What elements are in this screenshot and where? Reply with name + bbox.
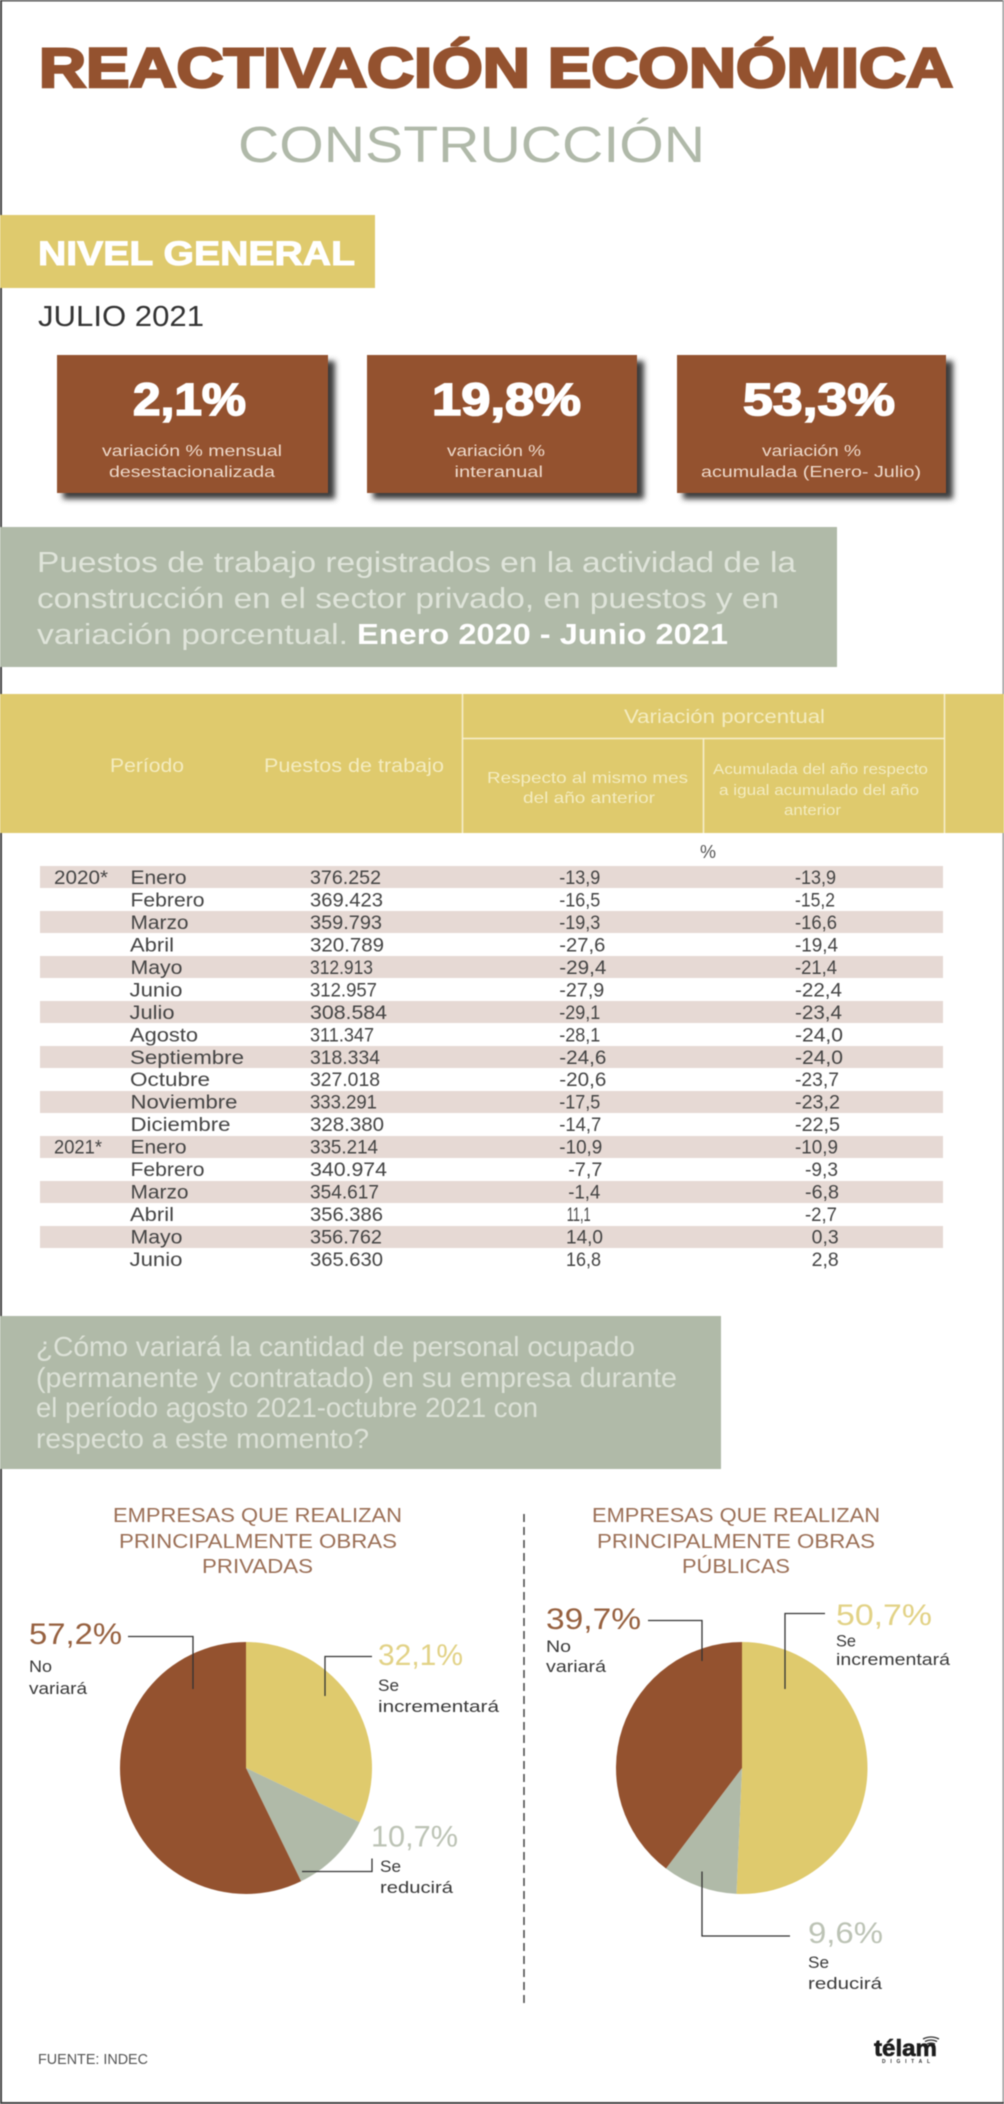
table header: anterior <box>784 803 841 819</box>
section heading: nivel general <box>0 215 375 288</box>
row: marzo 2020: -16,6 <box>795 913 837 934</box>
panel: pregunta de la encuesta: (permanente y contratado) en su empresa durante <box>36 1362 677 1393</box>
row: julio 2020: 308.584 <box>310 1003 387 1024</box>
row: febrero 2021: 340.974 <box>310 1160 387 1181</box>
pie chart: obras públicas <box>616 1642 867 1894</box>
row: junio 2020 <box>130 980 842 1001</box>
panel: descripción de la tabla <box>0 527 837 667</box>
row: abril 2020: -27,6 <box>559 935 605 956</box>
panel: descripción de la tabla: variación porcentual. <box>37 619 348 651</box>
callout: privadas se reducirá: Se <box>380 1857 401 1876</box>
callout: públicas no variará: 39,7% <box>546 1603 641 1636</box>
dashed divider <box>523 1514 525 2008</box>
row: junio 2020: -22,4 <box>795 980 842 1001</box>
row: febrero 2021: Febrero <box>130 1160 204 1181</box>
heading: obras privadas: EMPRESAS QUE REALIZAN <box>113 1505 402 1527</box>
row: mayo 2020: Mayo <box>130 958 182 979</box>
callout: privadas no variará: variará <box>29 1679 88 1698</box>
row: marzo 2020: Marzo <box>130 913 188 934</box>
row: diciembre 2020: Diciembre <box>130 1115 230 1136</box>
callout: públicas se reducirá: Se <box>808 1953 829 1972</box>
callout: privadas no variará <box>29 1618 193 1698</box>
row: mayo 2021: 0,3 <box>812 1228 839 1248</box>
row: mayo 2020: 312.913 <box>310 958 373 979</box>
stat card: variación interanual: interanual <box>454 464 543 481</box>
row: julio 2020 <box>130 1003 842 1024</box>
section heading: nivel general: NIVEL GENERAL <box>38 235 355 273</box>
row: octubre 2020: 327.018 <box>310 1070 380 1091</box>
callout: privadas se incrementará: 32,1% <box>378 1639 463 1672</box>
row: junio 2021: 365.630 <box>310 1250 383 1271</box>
row: junio 2020: Junio <box>130 980 182 1001</box>
row: abril 2020: -19,4 <box>795 935 838 956</box>
row: junio 2020: 312.957 <box>310 980 377 1001</box>
row: agosto 2020 <box>130 1025 843 1046</box>
row: enero 2021: -10,9 <box>795 1138 838 1159</box>
callout: públicas se reducirá <box>702 1872 883 1993</box>
stat card: variación acumulada: variación % <box>762 443 861 460</box>
heading: obras privadas: PRIVADAS <box>202 1556 313 1578</box>
callout: privadas se incrementará: Se <box>378 1676 399 1695</box>
pie chart: obras privadas <box>120 1642 372 1894</box>
row: enero 2021: -10,9 <box>559 1138 602 1159</box>
panel: descripción de la tabla: Puestos de trabajo registrados en la actividad de la <box>37 547 797 579</box>
row: marzo 2020: 359.793 <box>310 913 382 934</box>
row: septiembre 2020: -24,0 <box>795 1048 843 1069</box>
row: enero 2020 <box>54 868 836 889</box>
row: febrero 2021: -7,7 <box>568 1160 602 1181</box>
heading: obras públicas: PÚBLICAS <box>682 1555 790 1578</box>
panel: pregunta de la encuesta: respecto a este momento? <box>36 1423 369 1454</box>
row: febrero 2020: -15,2 <box>795 890 835 912</box>
row: julio 2020: -23,4 <box>795 1003 842 1024</box>
row: septiembre 2020 <box>130 1048 843 1069</box>
stat card: variación interanual: 19,8% <box>432 374 581 425</box>
heading: obras privadas: PRINCIPALMENTE OBRAS <box>119 1531 397 1553</box>
row: marzo 2021: -6,8 <box>805 1183 839 1204</box>
row: diciembre 2020: -14,7 <box>559 1115 601 1136</box>
row: noviembre 2020: 333.291 <box>310 1093 377 1114</box>
row: mayo 2021: 14,0 <box>566 1228 603 1248</box>
callout: públicas no variará: No <box>546 1637 571 1656</box>
row: mayo 2020: -29,4 <box>559 958 607 979</box>
row: junio 2021: Junio <box>130 1250 182 1271</box>
row: agosto 2020: 311.347 <box>310 1025 374 1046</box>
row: marzo 2021: Marzo <box>130 1183 188 1204</box>
row: julio 2020: Julio <box>130 1003 174 1024</box>
callout: privadas se reducirá: reducirá <box>380 1878 454 1897</box>
table header: Respecto al mismo mes <box>487 770 688 787</box>
row: abril 2020: Abril <box>130 935 174 956</box>
data table <box>40 866 943 1271</box>
row: febrero 2021 <box>130 1160 838 1181</box>
panel: descripción de la tabla: Enero 2020 - Junio 2021 <box>357 619 728 651</box>
callout: privadas no variará: 57,2% <box>29 1618 122 1651</box>
row: septiembre 2020: -24,6 <box>559 1048 606 1069</box>
row: mayo 2020: -21,4 <box>795 958 837 979</box>
callout: privadas no variará: No <box>29 1657 52 1676</box>
row: abril 2021: -2,7 <box>805 1205 837 1226</box>
row: marzo 2021: -1,4 <box>568 1183 601 1204</box>
row: enero 2021 <box>54 1138 838 1159</box>
row: agosto 2020: Agosto <box>130 1025 198 1046</box>
callout: privadas se incrementará <box>325 1639 500 1716</box>
row: octubre 2020: Octubre <box>130 1070 210 1091</box>
callout: públicas se incrementará: 50,7% <box>836 1599 932 1632</box>
callout: privadas se reducirá <box>302 1820 458 1897</box>
row: junio 2021: 16,8 <box>566 1250 601 1271</box>
stat card: variación mensual: variación % mensual <box>102 443 282 460</box>
row: julio 2020: -29,1 <box>559 1003 600 1024</box>
row: junio 2021 <box>130 1250 839 1271</box>
row: enero 2021: 335.214 <box>310 1138 378 1159</box>
row: octubre 2020 <box>130 1070 839 1091</box>
row: enero 2020: -13,9 <box>559 868 600 889</box>
row: febrero 2020: -16,5 <box>559 890 600 912</box>
heading: obras públicas: EMPRESAS QUE REALIZAN <box>592 1505 880 1527</box>
panel: pregunta de la encuesta: ¿Cómo variará la cantidad de personal ocupado <box>36 1331 635 1362</box>
table header: del año anterior <box>523 790 656 807</box>
row: enero 2020: -13,9 <box>795 868 836 889</box>
row: septiembre 2020: Septiembre <box>130 1048 244 1069</box>
heading: obras privadas <box>113 1505 402 1578</box>
row: abril 2021: 356.386 <box>310 1205 383 1226</box>
table header: Período <box>110 756 184 777</box>
stat card: variación interanual: variación % <box>447 443 545 460</box>
row: agosto 2020: -28,1 <box>559 1025 600 1046</box>
row: noviembre 2020 <box>130 1093 840 1114</box>
row: mayo 2021: Mayo <box>130 1228 182 1248</box>
callout: públicas no variará: variará <box>546 1657 607 1676</box>
row: diciembre 2020: 328.380 <box>310 1115 384 1136</box>
stat card: variación mensual: 2,1% <box>133 374 246 425</box>
date label: JULIO 2021 <box>38 301 204 333</box>
stat card: variación mensual: desestacionalizada <box>109 464 275 481</box>
unit label: % <box>700 842 716 862</box>
row: agosto 2020: -24,0 <box>795 1025 843 1046</box>
row: octubre 2020: -20,6 <box>559 1070 606 1091</box>
table header: Puestos de trabajo <box>264 756 444 777</box>
callout: privadas se incrementará: incrementará <box>378 1697 500 1716</box>
row: abril 2021 <box>130 1205 837 1226</box>
row: enero 2021: Enero <box>130 1138 186 1159</box>
callout: públicas se reducirá: reducirá <box>808 1974 883 1993</box>
row: enero 2020: 376.252 <box>310 868 381 889</box>
subtitle: CONSTRUCCIÓN <box>238 116 705 173</box>
panel: pregunta de la encuesta: el período agosto 2021-octubre 2021 con <box>36 1392 538 1423</box>
row: abril 2020 <box>130 935 838 956</box>
row: febrero 2020: 369.423 <box>310 890 383 912</box>
stat card: variación interanual <box>367 355 644 499</box>
logo: télam digital: télam <box>874 2035 937 2061</box>
row: noviembre 2020: Noviembre <box>130 1093 238 1114</box>
panel: pregunta de la encuesta <box>0 1316 721 1469</box>
table header: Acumulada del año respecto <box>713 762 928 778</box>
source note: FUENTE: INDEC <box>38 2051 148 2068</box>
heading: obras públicas: PRINCIPALMENTE OBRAS <box>597 1531 875 1553</box>
table header <box>0 694 1004 833</box>
stat card: variación mensual <box>57 355 335 499</box>
row: octubre 2020: -23,7 <box>795 1070 839 1091</box>
row: diciembre 2020 <box>130 1115 840 1136</box>
row: febrero 2020 <box>130 890 835 912</box>
row: enero 2021: 2021* <box>54 1138 103 1159</box>
logo: télam digital: DIGITAL <box>882 2059 930 2065</box>
row: marzo 2021 <box>130 1183 839 1204</box>
row: noviembre 2020: -17,5 <box>559 1093 600 1114</box>
row: marzo 2020: -19,3 <box>559 913 600 934</box>
row: abril 2021: 11,1 <box>567 1205 591 1226</box>
table header: a igual acumulado del año <box>719 783 919 799</box>
callout: públicas se incrementará: Se <box>836 1632 856 1650</box>
row: mayo 2021: 356.762 <box>310 1228 382 1248</box>
row: mayo 2020 <box>130 958 837 979</box>
row: enero 2020: Enero <box>130 868 186 889</box>
row: marzo 2020 <box>130 913 837 934</box>
callout: públicas se reducirá: 9,6% <box>808 1917 883 1950</box>
table header: Variación porcentual <box>624 707 825 728</box>
stat card: variación acumulada: 53,3% <box>743 374 895 425</box>
stat card: variación acumulada <box>677 355 953 499</box>
row: junio 2021: 2,8 <box>812 1250 839 1271</box>
row: febrero 2021: -9,3 <box>805 1160 838 1181</box>
panel: descripción de la tabla: construcción en el sector privado, en puestos y en <box>37 583 779 615</box>
row: enero 2020: 2020* <box>54 868 109 889</box>
row: noviembre 2020: -23,2 <box>795 1093 840 1114</box>
row: febrero 2020: Febrero <box>130 890 204 912</box>
row: septiembre 2020: 318.334 <box>310 1048 380 1069</box>
callout: públicas se incrementará <box>785 1599 951 1689</box>
callout: públicas se incrementará: incrementará <box>836 1650 951 1669</box>
row: junio 2020: -27,9 <box>559 980 604 1001</box>
row: diciembre 2020: -22,5 <box>795 1115 840 1136</box>
row: marzo 2021: 354.617 <box>310 1183 379 1204</box>
callout: privadas se reducirá: 10,7% <box>371 1820 458 1854</box>
title: REACTIVACIÓN ECONÓMICA <box>39 36 953 99</box>
row: abril 2021: Abril <box>130 1205 174 1226</box>
row: abril 2020: 320.789 <box>310 935 384 956</box>
heading: obras públicas <box>592 1505 880 1578</box>
row: mayo 2021 <box>130 1228 839 1248</box>
callout: públicas no variará <box>546 1603 702 1676</box>
stat card: variación acumulada: acumulada (Enero- Julio) <box>701 464 921 481</box>
